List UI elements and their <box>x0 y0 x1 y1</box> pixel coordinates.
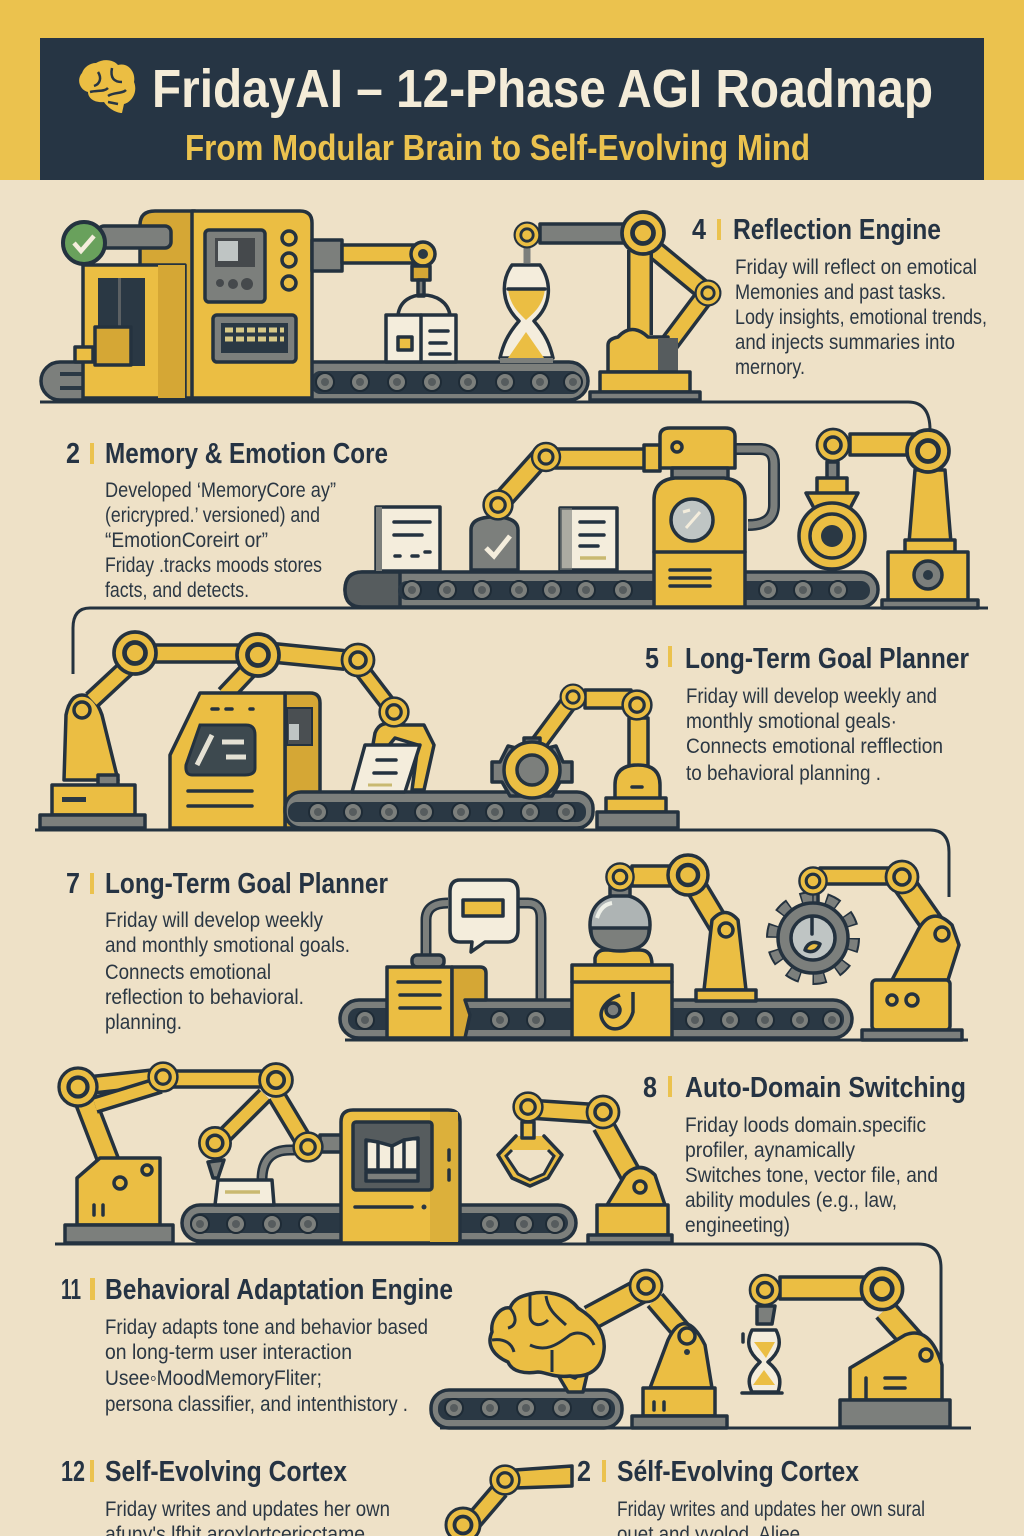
body text: Connects emotional <box>105 961 271 984</box>
machine with screen <box>170 693 320 828</box>
flask machine <box>572 880 672 1038</box>
body text: to behavioral planning . <box>686 762 881 785</box>
pipes <box>426 903 541 1002</box>
illustration: assembly line 4 <box>340 855 962 1040</box>
icon: brain <box>79 60 135 113</box>
connector lines <box>35 402 988 1428</box>
body text: ability modules (e.g., law, <box>685 1189 897 1212</box>
document <box>560 508 617 570</box>
body text <box>105 1498 390 1536</box>
heading: 11 <box>61 1274 81 1306</box>
machine <box>75 211 312 398</box>
gray bottle with check <box>471 517 518 570</box>
heading: Sélf-Evolving Cortex <box>617 1456 859 1488</box>
body text: and injects summaries into <box>735 331 955 354</box>
machine with lens <box>644 428 774 607</box>
conveyor <box>431 1390 622 1428</box>
illustration: assembly line 5 <box>59 1063 672 1243</box>
left robot arm <box>40 632 434 828</box>
body text <box>105 479 336 602</box>
heading: Memory & Emotion Core <box>105 438 388 470</box>
body text: monthly smotional geals· <box>686 710 897 733</box>
hourglass robot arm <box>750 1268 950 1427</box>
heading: Auto-Domain Switching <box>685 1072 966 1104</box>
heading: 2 <box>577 1456 591 1488</box>
body text: Developed ‘MemoryCore ay” <box>105 479 336 502</box>
heading: 7 <box>66 868 80 900</box>
conveyor <box>182 1205 576 1241</box>
section 11: Behavioral Adaptation Engine <box>61 1274 453 1416</box>
heading: Self-Evolving Cortex <box>105 1456 347 1488</box>
brain robot arm <box>590 1270 727 1428</box>
icon: green check and cylinder <box>63 222 171 264</box>
body text: and monthly smotional goals. <box>105 934 350 957</box>
document <box>376 507 440 571</box>
body text: Friday will reflect on emotical <box>735 256 977 279</box>
body text: persona classifier, and intenthistory . <box>105 1393 408 1416</box>
heading: 4 <box>692 214 706 246</box>
robot arm <box>484 443 647 519</box>
body text: mernory. <box>735 356 805 379</box>
body text: (ericrypred.’ versioned) and <box>105 504 320 527</box>
section 12: Self-Evolving Cortex (right) <box>577 1456 925 1536</box>
body text: Friday will develop weekly <box>105 909 323 932</box>
heading: Reflection Engine <box>733 214 941 246</box>
subtitle: From Modular Brain to Self-Evolving Mind <box>185 127 810 168</box>
body text <box>685 1114 938 1237</box>
body text <box>105 1316 428 1416</box>
body text: Friday loods domain.specific <box>685 1114 926 1137</box>
paper <box>352 745 420 792</box>
section 8: Auto-Domain Switching <box>643 1072 966 1237</box>
body text: engineeting) <box>685 1214 790 1237</box>
section 4: Reflection Engine <box>692 214 987 379</box>
section 12: Self-Evolving Cortex (left) <box>61 1456 390 1536</box>
conveyor <box>345 572 878 607</box>
left robot arm <box>59 1063 306 1243</box>
conveyor <box>285 792 593 828</box>
body text <box>735 256 987 379</box>
machine with book screen <box>341 1110 460 1243</box>
body text: Friday writes and updates her own <box>105 1498 390 1521</box>
body text: “EmotionCoreirt or” <box>105 529 268 552</box>
heading: 5 <box>645 643 659 675</box>
robot arm <box>515 212 720 400</box>
heading: Long-Term Goal Planner <box>685 643 969 675</box>
conveyor <box>340 1000 852 1038</box>
section 5: Long-Term Goal Planner <box>645 643 969 785</box>
section 7: Long-Term Goal Planner <box>66 868 388 1034</box>
illustration: assembly line 2 <box>345 428 978 608</box>
box machine <box>387 955 486 1038</box>
body text <box>617 1498 925 1536</box>
gear and robot arm <box>492 685 678 828</box>
body text: Friday will develop weekly and <box>686 685 937 708</box>
robot arm and book <box>312 240 456 362</box>
body text: Switches tone, vector file, and <box>685 1164 938 1187</box>
heading: 8 <box>643 1072 657 1104</box>
illustration: assembly line 6 <box>431 1268 950 1428</box>
body text: planning. <box>105 1011 182 1034</box>
robot arm <box>606 855 756 1001</box>
robot arm with wheel <box>799 429 978 608</box>
title: FridayAI – 12-Phase AGI Roadmap <box>152 59 933 119</box>
paper and tool <box>199 1127 342 1205</box>
body text: profiler, aynamically <box>685 1139 855 1162</box>
conveyor <box>41 362 588 400</box>
icon: brain <box>490 1292 604 1392</box>
body text: Lody insights, emotional trends, <box>735 306 987 329</box>
body text: on long-term user interaction <box>105 1341 352 1364</box>
body text: Friday adapts tone and behavior based <box>105 1316 428 1339</box>
claw robot arm <box>498 1093 672 1243</box>
heading: Behavioral Adaptation Engine <box>105 1274 453 1306</box>
body text <box>686 685 943 785</box>
heading: 12 <box>61 1456 85 1488</box>
body text <box>105 909 350 1034</box>
body text: Connects emotional refflection <box>686 735 943 758</box>
heading: 2 <box>66 438 80 470</box>
gear robot <box>773 861 962 1040</box>
header band <box>0 0 1024 180</box>
icon: hourglass <box>500 247 553 363</box>
body text: Memonies and past tasks. <box>735 281 946 304</box>
body text: facts, and detects. <box>105 579 249 602</box>
body text: Usee◦MoodMemoryFliter; <box>105 1367 322 1390</box>
body text: Friday writes and updates her own sural <box>617 1498 925 1521</box>
body text: Friday .tracks moods stores <box>105 554 322 577</box>
illustration: assembly line 1 <box>41 211 720 400</box>
speech bubble <box>450 880 518 952</box>
bottom robot arm <box>446 1466 572 1536</box>
icon: hourglass <box>742 1330 782 1393</box>
body text: reflection to behavioral. <box>105 986 304 1009</box>
heading: Long-Term Goal Planner <box>105 868 388 900</box>
illustration: assembly line 3 <box>40 632 678 828</box>
section 2: Memory & Emotion Core <box>66 438 388 602</box>
